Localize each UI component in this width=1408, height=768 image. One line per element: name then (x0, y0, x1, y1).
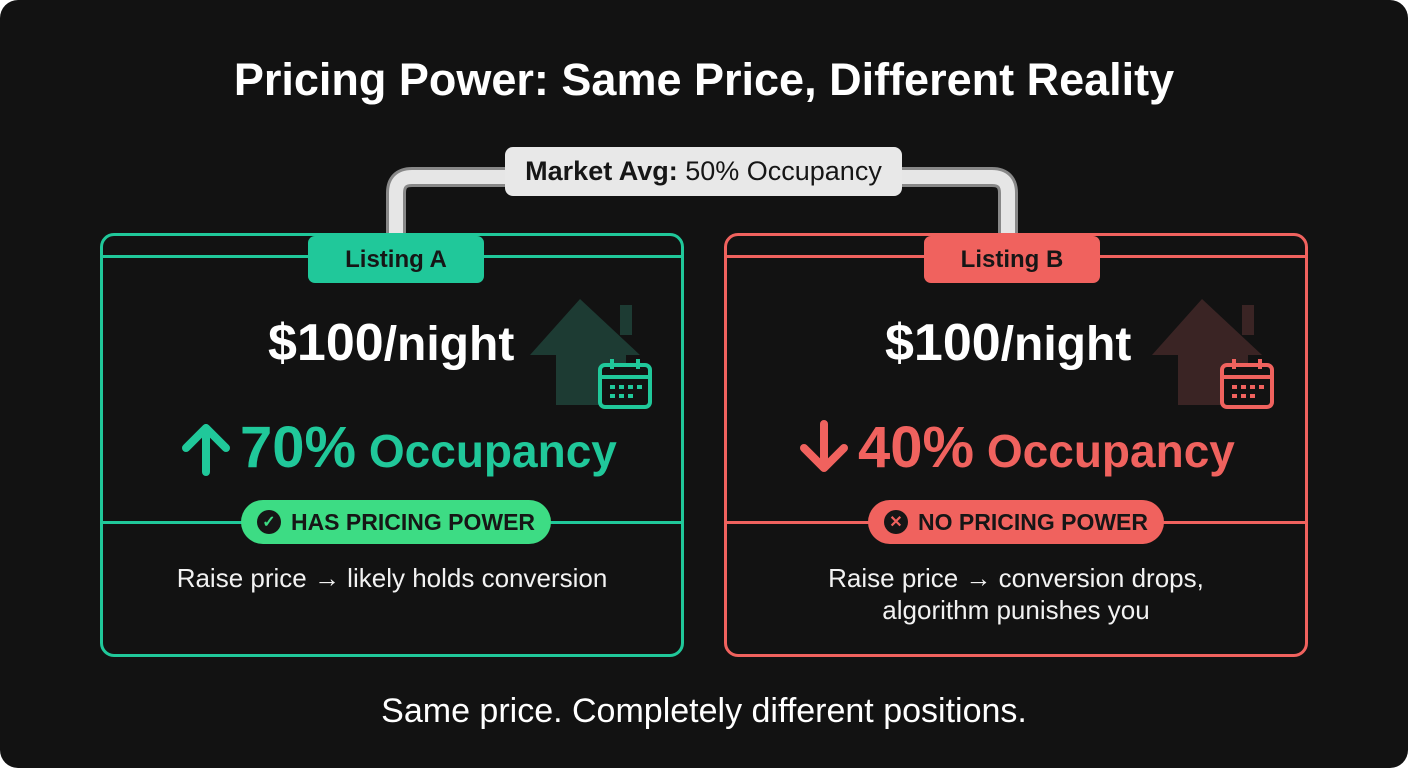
description A: Raise price → likely holds conversion (177, 563, 607, 593)
occupancy A: Occupancy (369, 425, 617, 477)
pill: has pricing power: ✓ (262, 514, 276, 531)
description B: algorithm punishes you (882, 595, 1150, 625)
badge: Listing B: Listing B (961, 246, 1063, 272)
occupancy B (800, 415, 1235, 480)
connector bracket (386, 167, 1018, 233)
badge: Listing A (308, 236, 484, 283)
market average label: 50% Occupancy (685, 156, 882, 186)
pill: has pricing power (241, 500, 551, 544)
market average label: Market Avg: (525, 156, 678, 186)
pill: no pricing power (868, 500, 1164, 544)
price B: $100/night (885, 314, 1131, 372)
title: Pricing Power: Same Price, Different Reality (234, 54, 1174, 105)
occupancy A (182, 415, 617, 480)
description B (828, 563, 1204, 625)
pill: has pricing power: HAS PRICING POWER (291, 508, 535, 534)
occupancy B: 40% (858, 415, 974, 480)
occupancy A: 70% (240, 415, 356, 480)
occupancy B: Occupancy (987, 425, 1235, 477)
badge: Listing A: Listing A (345, 246, 447, 272)
panel: listing B (724, 233, 1308, 657)
price A: $100/night (268, 314, 514, 372)
market average label (505, 147, 902, 196)
icon: house A (530, 299, 652, 409)
description B: Raise price → conversion drops, (828, 563, 1204, 593)
pill: no pricing power: ✕ (889, 514, 903, 531)
pill: no pricing power: NO PRICING POWER (918, 508, 1148, 534)
footer text: Same price. Completely different positions. (381, 692, 1027, 730)
panel: listing A (100, 233, 684, 657)
badge: Listing B (924, 236, 1100, 283)
icon: house B (1152, 299, 1274, 409)
